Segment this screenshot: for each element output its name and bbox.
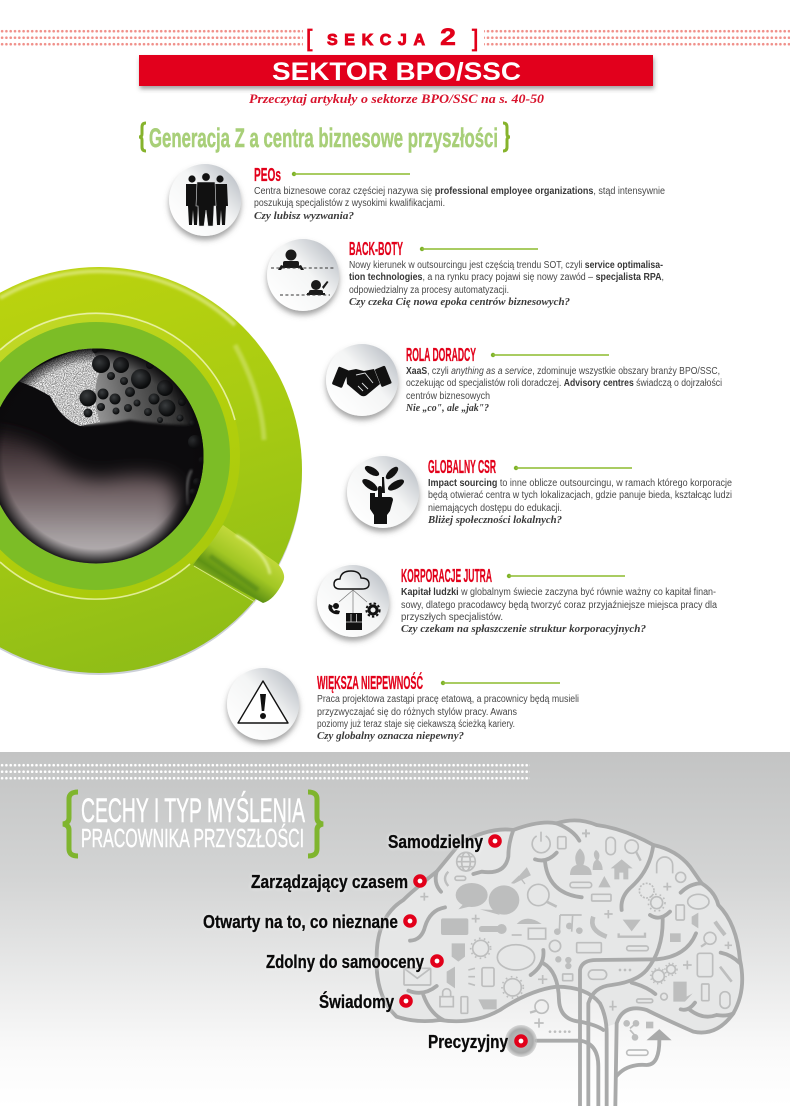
body text <box>406 366 722 402</box>
item: PEOs <box>169 164 665 236</box>
icon: cloud network <box>317 565 389 637</box>
coffee cup photo <box>0 267 302 675</box>
question: Nie „co", ale „jak"? <box>405 403 489 414</box>
heading: BACK-BOTY <box>349 239 403 259</box>
body text <box>401 587 717 623</box>
question: Czy czekam na spłaszczenie struktur korporacyjnych? <box>401 624 646 635</box>
body text: Praca projektowa zastąpi pracę etatową, a pracownicy będą musieli <box>317 694 579 705</box>
coffee edge shading <box>0 348 204 564</box>
body text: centrów biznesowych <box>406 391 490 402</box>
trait: Zarządzający czasem: Zarządzający czasem <box>251 871 408 892</box>
section label: [ <box>306 25 313 51</box>
brain diagram <box>375 820 742 1106</box>
body text: tion technologies, a na rynku pracy pojawi się nowy zawód – specjalista RPA, <box>349 272 664 283</box>
foam with bubbles <box>75 351 193 425</box>
question: Bliżej społeczności lokalnych? <box>427 515 562 526</box>
heading: WIĘKSZA NIEPEWNOŚĆ <box>317 672 423 693</box>
foam <box>18 346 100 426</box>
body text: będą otwierać centra w tych lokalizacjach, gdzie panuje bieda, kształcąc ludzi <box>428 490 732 501</box>
item: Rola doradcy: ROLA DORADCY <box>406 345 476 365</box>
brain outline and circuits <box>377 820 742 1106</box>
question: Czy lubisz wyzwania? <box>254 211 354 222</box>
body text: XaaS, czyli anything as a service, zdominuje wszystkie obszary branży BPO/SSC, <box>406 366 720 377</box>
icon: business people <box>169 164 241 236</box>
trait: Otwarty na to, co nieznane: Otwarty na to, co nieznane <box>203 911 398 932</box>
icon: warning triangle <box>227 668 299 740</box>
trait: Zdolny do samooceny: Zdolny do samooceny <box>266 951 425 972</box>
section label: ] <box>472 25 478 51</box>
lower section title <box>63 791 323 856</box>
icon: robots <box>267 239 339 311</box>
question: Czy czeka Cię nowa epoka centrów biznesowych? <box>349 297 570 308</box>
heading: PEOs <box>254 165 281 185</box>
brain icons <box>404 829 732 1055</box>
milk swirl <box>0 432 177 590</box>
item: Korporacje jutra <box>317 565 717 637</box>
cup rim <box>0 312 240 600</box>
green rule <box>514 466 632 470</box>
body text: sowy, dlatego pracodawcy będą tworzyć coraz przyjaźniejsze miejsca pracy dla <box>401 600 717 611</box>
item: Korporacje jutra: KORPORACJE JUTRA <box>401 566 492 586</box>
brain fill <box>375 820 742 1033</box>
item: Globalny CSR: GLOBALNY CSR <box>428 457 496 477</box>
body text: Kapitał ludzki w globalnym świecie zaczyna być równie ważny co kapitał finan- <box>401 587 716 598</box>
bubbles <box>80 347 206 496</box>
trait labels <box>203 831 537 1057</box>
section label: 2 <box>440 24 456 51</box>
item: Większa niepewność <box>227 668 579 742</box>
body text: Impact sourcing to inne oblicze outsourcingu, w ramach którego korporacje <box>428 478 732 489</box>
body text <box>349 260 664 296</box>
body text <box>317 694 579 730</box>
green heading <box>139 123 510 153</box>
green rule <box>420 247 538 251</box>
body text <box>254 186 665 209</box>
green rule <box>441 681 560 685</box>
green heading: Generacja Z a centra biznesowe przyszłości <box>149 123 498 153</box>
cup handle <box>193 525 284 603</box>
body text: poszukują specjalistów z wysokimi kwalifikacjami. <box>254 198 445 209</box>
section label: SEKCJA <box>327 32 425 49</box>
trait: Precyzyjny: Precyzyjny <box>428 1031 509 1052</box>
trait: Precyzyjny <box>428 1025 537 1057</box>
trait: Samodzielny: Samodzielny <box>388 831 484 852</box>
trait: Świadomy: Świadomy <box>319 991 395 1012</box>
red title bar: SEKTOR BPO/SSC <box>272 58 521 86</box>
icon: plant in hand <box>347 456 419 528</box>
body text <box>428 478 732 514</box>
body text: przyzwyczajać się do różnych stylów pracy. Awans <box>317 707 517 718</box>
panel: gray lower section <box>0 752 790 1106</box>
lower section title: CECHY I TYP MYŚLENIA <box>81 791 305 830</box>
section label <box>306 24 478 51</box>
coffee <box>0 348 204 564</box>
question: Czy globalny oznacza niepewny? <box>317 731 464 742</box>
green rule <box>491 353 609 357</box>
body text: poziomy już teraz staje się ciekawszą ścieżką kariery. <box>317 719 515 730</box>
body text: przyszłych specjalistów. <box>401 612 503 623</box>
body text: niemających dostępu do edukacji. <box>428 503 562 514</box>
green rule <box>292 172 410 176</box>
body text: Centra biznesowe coraz częściej nazywa się professional employee organizations, stąd intensywnie <box>254 186 665 197</box>
green rule <box>507 574 625 578</box>
body text: odpowiedzialny za procesy automatyzacji. <box>349 285 509 296</box>
icon: handshake <box>326 344 398 416</box>
dotted band: section header <box>0 28 790 48</box>
body text: oczekując od specjalistów roli doradczej. Advisory centres świadczą o dojrzałości <box>406 378 722 389</box>
item: Globalny CSR <box>347 456 732 528</box>
item: Rola doradcy <box>326 344 722 416</box>
body text: Nowy kierunek w outsourcingu jest częścią trendu SOT, czyli service optimalisa- <box>349 260 663 271</box>
item: Back-boty <box>267 239 664 311</box>
lower section title: PRACOWNIKA PRZYSZŁOŚCI <box>81 823 304 853</box>
dotted band: lower section <box>0 762 530 782</box>
subtitle: Przeczytaj artykuły o sektorze BPO/SSC na s. 40-50 <box>249 91 545 106</box>
cup inner wall <box>0 322 230 590</box>
red title bar <box>139 55 653 86</box>
saucer <box>0 267 302 675</box>
